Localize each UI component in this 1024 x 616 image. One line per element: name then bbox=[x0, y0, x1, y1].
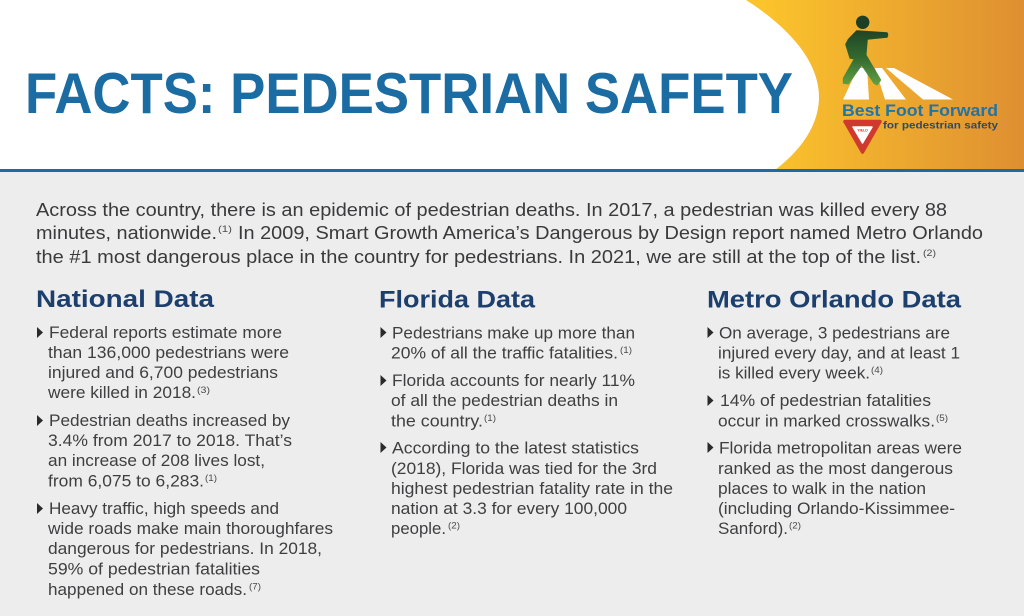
bullet: injuries and deaths: than 136,000 pedestrians were bbox=[48, 344, 289, 362]
bullet: daily injuries: On average, 3 pedestrians are bbox=[719, 324, 950, 342]
bullet: marked crosswalks: 14% of pedestrian fatalities bbox=[720, 392, 931, 410]
bullet: fatality rate: nation at 3.3 for every 100,000 bbox=[391, 500, 627, 518]
bullet: daily injuries: (4) bbox=[871, 365, 883, 376]
logo wordmark: Best Foot Forward bbox=[842, 102, 998, 120]
title: FACTS: PEDESTRIAN SAFETY bbox=[25, 62, 793, 126]
heading: National Data: National Data bbox=[36, 286, 215, 313]
intro paragraph: Across the country, there is an epidemic of pedestrian deaths. In 2017, a pedestrian was killed every 88 bbox=[36, 199, 947, 220]
bullet: share of national deaths bbox=[380, 372, 635, 430]
bullet: share of national deaths: of all the pedestrian deaths in bbox=[391, 392, 618, 410]
bullet: main thoroughfares: dangerous for pedestrians. In 2018, bbox=[48, 540, 322, 558]
bullet: fatality rate: people. bbox=[391, 520, 446, 538]
bullet: deaths increased: Pedestrian deaths increased by bbox=[49, 412, 291, 430]
logo tagline: for pedestrian safety bbox=[883, 120, 998, 132]
bullet: injuries and deaths bbox=[37, 324, 289, 402]
bullet: injuries and deaths: injured and 6,700 pedestrians bbox=[48, 364, 278, 382]
intro paragraph: (2) bbox=[923, 248, 936, 259]
bullet: share of fatalities bbox=[380, 324, 635, 362]
bullet: deaths increased: from 6,075 to 6,283. bbox=[48, 472, 204, 490]
bullet: marked crosswalks: (5) bbox=[936, 413, 948, 424]
icon: yield sign: YIELD bbox=[857, 128, 868, 132]
bullet: metropolitan areas: Sanford). bbox=[718, 520, 788, 538]
intro paragraph: In 2009, Smart Growth America’s Dangerous by Design report named Metro Orlando bbox=[238, 222, 983, 243]
bullet: share of national deaths: (1) bbox=[484, 413, 496, 424]
bullet: daily injuries: injured every day, and at least 1 bbox=[718, 344, 960, 362]
header banner bbox=[0, 0, 1024, 172]
bullet: main thoroughfares: 59% of pedestrian fatalities bbox=[48, 560, 260, 578]
bullet: injuries and deaths: Federal reports estimate more bbox=[49, 324, 282, 342]
bullet: metropolitan areas: ranked as the most dangerous bbox=[718, 460, 953, 478]
panel: Florida Data bbox=[379, 286, 673, 538]
bullet: injuries and deaths: (3) bbox=[197, 385, 210, 396]
bullet: fatality rate: highest pedestrian fatality rate in the bbox=[391, 480, 673, 498]
bullet: metropolitan areas bbox=[708, 440, 962, 538]
panel: National Data bbox=[36, 286, 333, 599]
bullet: share of fatalities: Pedestrians make up more than bbox=[392, 324, 635, 342]
heading: Florida Data: Florida Data bbox=[379, 286, 536, 314]
bullet: main thoroughfares bbox=[37, 500, 333, 599]
bullet: fatality rate bbox=[380, 440, 673, 538]
bullet: deaths increased: an increase of 208 lives lost, bbox=[48, 452, 265, 470]
icon: walking pedestrian bbox=[843, 16, 888, 85]
bullet: daily injuries: is killed every week. bbox=[718, 364, 870, 382]
bullet: deaths increased: 3.4% from 2017 to 2018. That’s bbox=[48, 432, 292, 450]
icon: crosswalk stripes bbox=[843, 68, 953, 100]
bullet: main thoroughfares: Heavy traffic, high speeds and bbox=[49, 500, 279, 518]
bullet: share of national deaths: Florida accounts for nearly 11% bbox=[392, 372, 635, 390]
intro paragraph: the #1 most dangerous place in the country for pedestrians. In 2021, we are still at the top of the list. bbox=[36, 246, 921, 267]
bullet: fatality rate: (2018), Florida was tied for the 3rd bbox=[391, 460, 657, 478]
bullet: metropolitan areas: Florida metropolitan areas were bbox=[719, 440, 962, 458]
bullet: marked crosswalks: occur in marked crosswalks. bbox=[718, 412, 935, 430]
bullet: metropolitan areas: (including Orlando-Kissimmee- bbox=[718, 500, 955, 518]
bullet: main thoroughfares: (7) bbox=[249, 582, 261, 592]
bullet: share of fatalities: 20% of all the traffic fatalities. bbox=[391, 344, 618, 362]
bullet: daily injuries bbox=[708, 324, 960, 382]
heading: Metro Orlando Data: Metro Orlando Data bbox=[707, 286, 962, 314]
intro paragraph: (1) bbox=[218, 224, 232, 235]
bullet: marked crosswalks bbox=[708, 392, 948, 430]
intro paragraph: minutes, nationwide. bbox=[36, 222, 217, 243]
bullet: injuries and deaths: were killed in 2018. bbox=[47, 384, 196, 402]
bullet: metropolitan areas: (2) bbox=[789, 520, 801, 532]
bullet: main thoroughfares: wide roads make main thoroughfares bbox=[47, 520, 333, 538]
bullet: fatality rate: According to the latest statistics bbox=[392, 440, 639, 458]
panel: Metro Orlando Data bbox=[707, 286, 962, 538]
logo: Best Foot Forward bbox=[842, 16, 998, 152]
bullet: metropolitan areas: places to walk in the nation bbox=[718, 480, 926, 498]
bullet: deaths increased bbox=[37, 412, 292, 490]
bullet: share of fatalities: (1) bbox=[620, 345, 632, 356]
bullet: share of national deaths: the country. bbox=[391, 412, 483, 430]
bullet: fatality rate: (2) bbox=[448, 520, 460, 532]
bullet: deaths increased: (1) bbox=[205, 473, 217, 484]
bullet: main thoroughfares: happened on these roads. bbox=[48, 581, 247, 599]
intro paragraph bbox=[36, 199, 983, 267]
icon: yield sign bbox=[845, 122, 880, 152]
